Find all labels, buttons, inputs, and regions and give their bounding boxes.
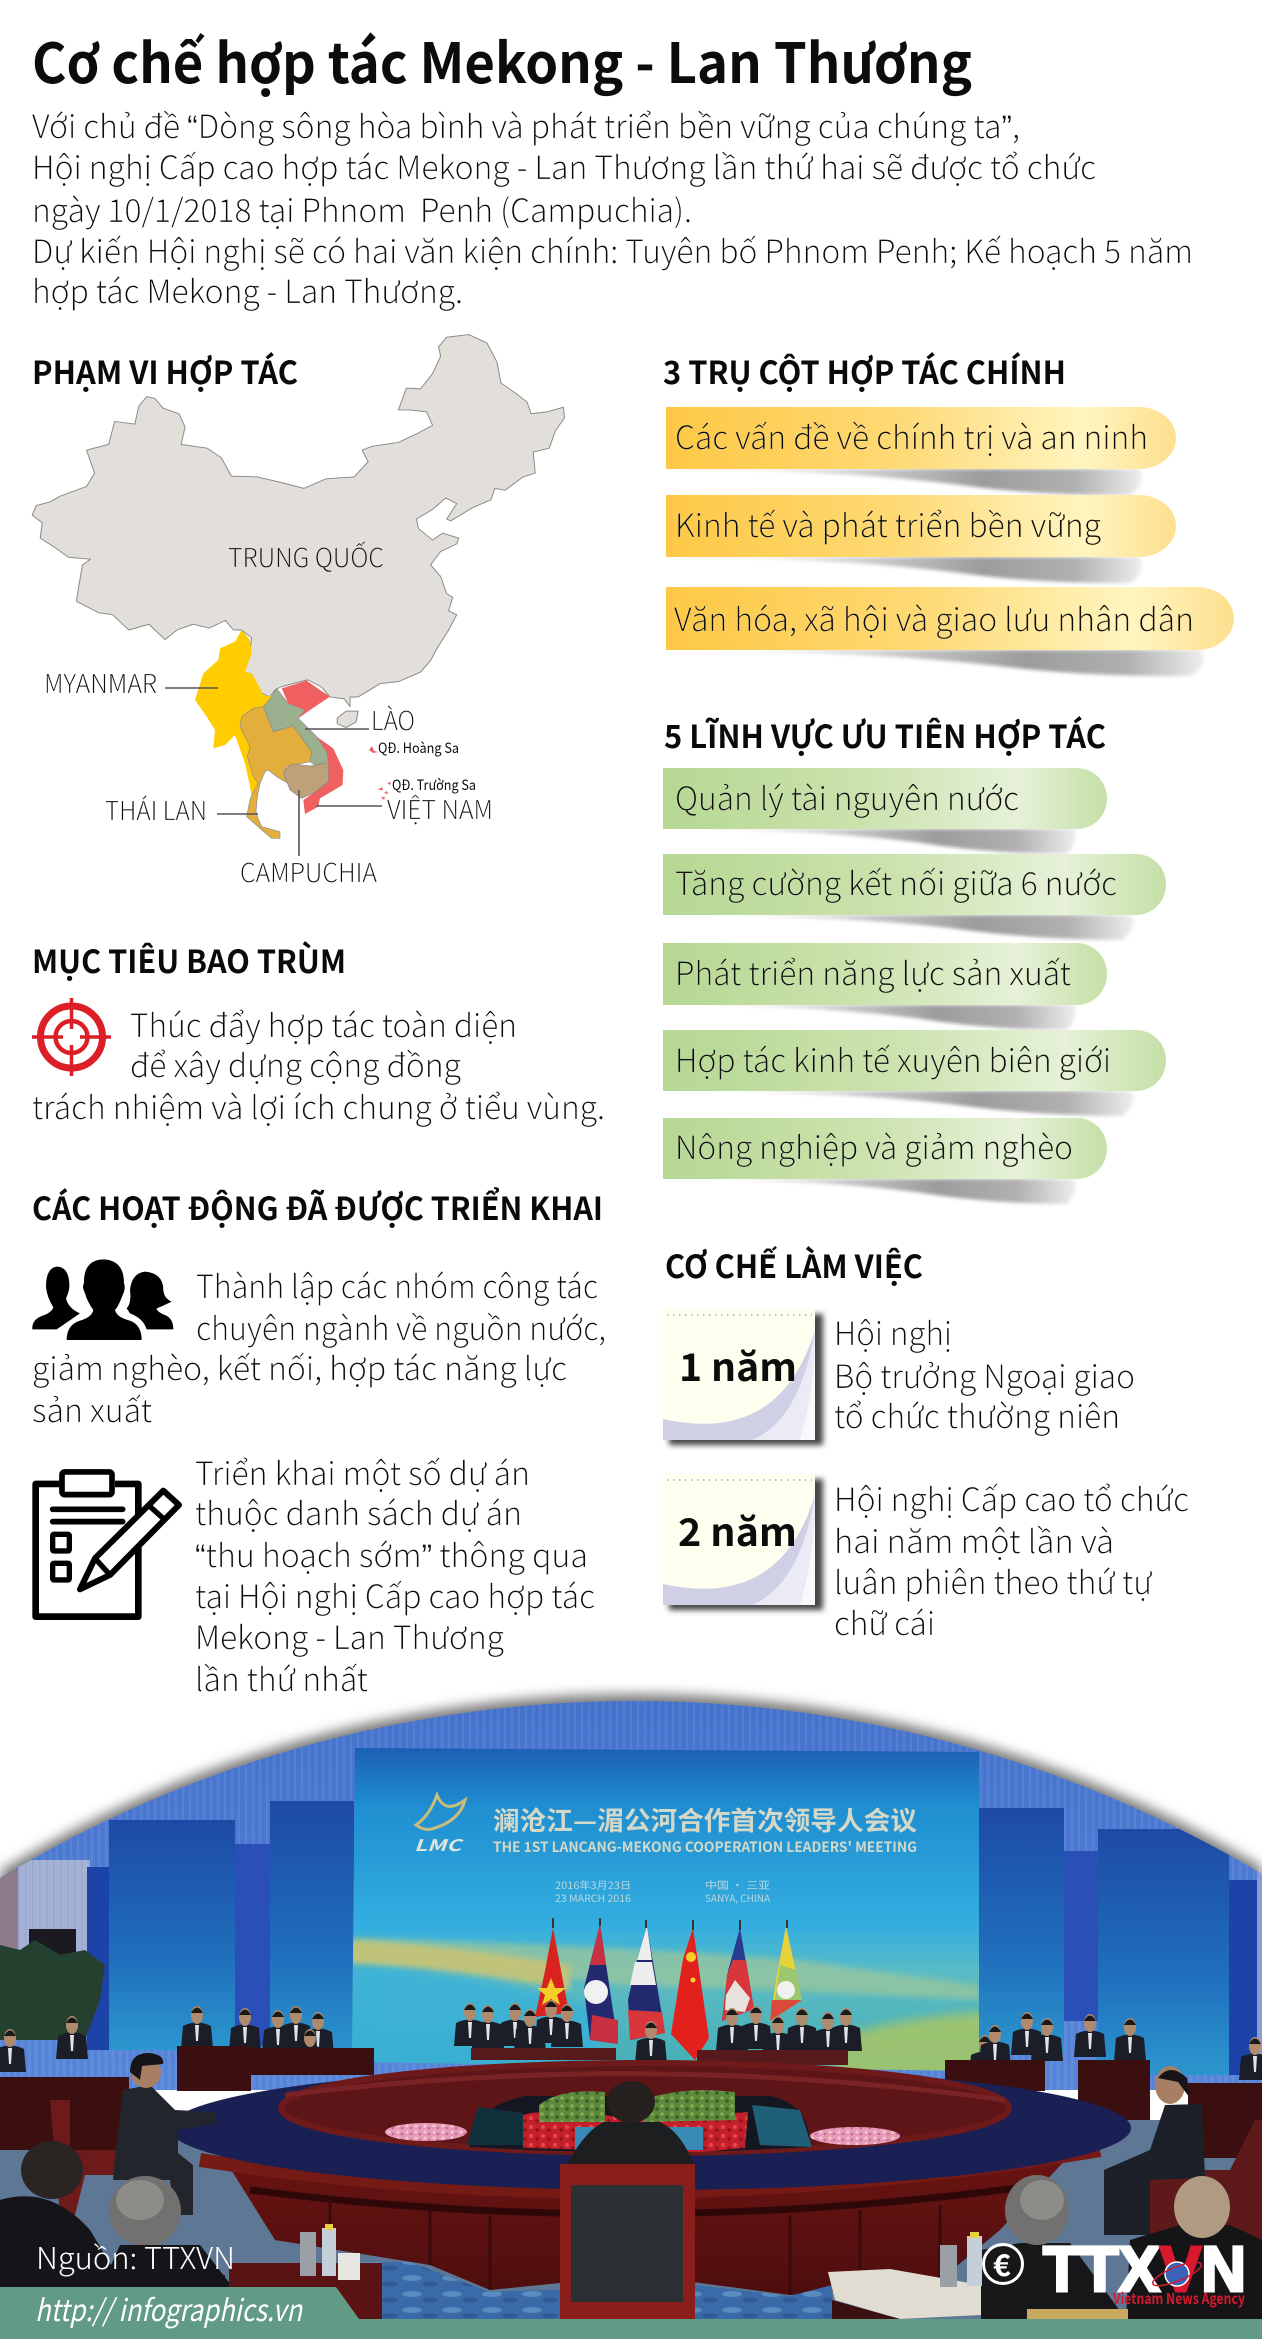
activity text 1 xyxy=(32,1262,606,1432)
flowers and monitors xyxy=(385,2090,900,2152)
url: http:// infographics.vn xyxy=(35,2286,303,2330)
LMC logo: LMC xyxy=(414,1832,465,1856)
pillar 3 xyxy=(666,587,1234,676)
mechanism text 1 xyxy=(834,1309,1135,1438)
priority 4 xyxy=(663,1030,1166,1116)
screen dates: 中国 · 三亚 xyxy=(705,1877,770,1892)
map label: Laos: LÀO xyxy=(371,701,415,738)
intro text block: hợp tác Mekong - Lan Thương. xyxy=(32,267,463,313)
foreground right delegates and papers xyxy=(828,2175,1262,2319)
main screen xyxy=(345,1748,990,2080)
Spratly islands: QĐ. Trường Sa xyxy=(392,775,476,795)
wordmark: TTXVN xyxy=(1043,2233,1246,2305)
goal text: trách nhiệm và lợi ích chung ở tiểu vùng. xyxy=(32,1083,605,1129)
source: Nguồn: TTXVN xyxy=(36,2234,235,2278)
panel: overarching goal xyxy=(32,937,605,1129)
map label: Cambodia: CAMPUCHIA xyxy=(240,853,378,890)
footer bar xyxy=(0,2319,1262,2339)
photo dome shadow xyxy=(0,1694,1262,1913)
activity text 1: chuyên ngành về nguồn nước, xyxy=(196,1304,606,1350)
intro text block: ngày 10/1/2018 tại Phnom Penh (Campuchia). xyxy=(32,186,692,232)
round table xyxy=(169,2063,1131,2295)
activity text 1: sản xuất xyxy=(32,1386,152,1432)
carpet xyxy=(362,2262,832,2319)
heading: goal: MỤC TIÊU BAO TRÙM xyxy=(32,937,346,983)
heading: activities: CÁC HOẠT ĐỘNG ĐÃ ĐƯỢC TRIỂN KHAI xyxy=(32,1184,603,1230)
six flags xyxy=(535,1918,802,2060)
goal text xyxy=(32,1001,605,1129)
mechanism text 1: Bộ trưởng Ngoại giao xyxy=(834,1352,1135,1398)
calendar: 2 years xyxy=(663,1474,823,1610)
Spratly islands xyxy=(378,775,476,800)
calendar: 1 year: 1 năm xyxy=(679,1337,797,1392)
activity text 1: Thành lập các nhóm công tác xyxy=(196,1262,598,1308)
screen dates: SANYA, CHINA xyxy=(705,1890,771,1905)
pillar 1 xyxy=(666,407,1176,495)
copyright mark: € xyxy=(993,2241,1011,2285)
map of China and Mekong countries xyxy=(32,335,565,838)
activity text 2: lần thứ nhất xyxy=(195,1655,368,1701)
footer tab xyxy=(0,2287,359,2339)
mechanism text 2: Hội nghị Cấp cao tổ chức xyxy=(834,1475,1189,1521)
foreground left delegates xyxy=(0,2141,235,2290)
heading: mechanism: CƠ CHẾ LÀM VIỆC xyxy=(665,1242,923,1288)
priority 5: Nông nghiệp và giảm nghèo xyxy=(675,1123,1073,1169)
priority 3: Phát triển năng lực sản xuất xyxy=(675,949,1071,995)
intro text block: Hội nghị Cấp cao hợp tác Mekong - Lan Thương lần thứ hai sẽ được tổ chức xyxy=(32,143,1096,189)
leader lines xyxy=(165,688,382,856)
mechanism text 2 xyxy=(834,1475,1189,1645)
panel: meeting photo xyxy=(0,1690,1262,2319)
screen title in English: THE 1ST LANCANG-MEKONG COOPERATION LEADERS' MEETING xyxy=(493,1837,917,1857)
map label: Vietnam: VIỆT NAM xyxy=(387,790,493,827)
activity text 2: Triển khai một số dự án xyxy=(195,1449,530,1495)
activity text 2 xyxy=(195,1449,595,1701)
copyright mark xyxy=(984,2241,1022,2285)
icon: clipboard and pen xyxy=(36,1472,179,1617)
seated delegate right xyxy=(1104,2066,1262,2250)
calendar: 1 year xyxy=(663,1309,823,1445)
priority 1: Quản lý tài nguyên nước xyxy=(675,774,1019,820)
calendar: 2 years: 2 năm xyxy=(678,1502,797,1557)
priority 2 xyxy=(663,854,1166,940)
mechanism text 2: hai năm một lần và xyxy=(834,1517,1114,1563)
intro text block: Với chủ đề “Dòng sông hòa bình và phát triển bền vững của chúng ta”, xyxy=(32,102,1020,148)
mechanism text 2: chữ cái xyxy=(834,1599,935,1645)
panel: three pillars xyxy=(663,348,1234,676)
panel: five priorities xyxy=(663,712,1166,1204)
central chair and delegate xyxy=(560,2081,695,2319)
stage backdrop xyxy=(0,1690,1262,2090)
pillar 3: Văn hóa, xã hội và giao lưu nhân dân xyxy=(674,595,1194,641)
pillar 2 xyxy=(666,495,1176,583)
icon: people xyxy=(32,1259,173,1340)
delegates rows xyxy=(0,2000,1262,2080)
intro text block xyxy=(32,102,1193,313)
activity text 2: thuộc danh sách dự án xyxy=(195,1489,522,1535)
priority 5 xyxy=(663,1118,1107,1204)
LMC logo xyxy=(414,1795,465,1856)
activity text 2: Mekong - Lan Thương xyxy=(195,1613,504,1659)
goal text: để xây dựng cộng đồng xyxy=(130,1041,461,1087)
mechanism text 1: Hội nghị xyxy=(834,1309,952,1355)
screen dates: 2016年3月23日 xyxy=(555,1877,631,1892)
floor xyxy=(0,2120,1262,2319)
heading: scope: PHẠM VI HỢP TÁC xyxy=(32,348,298,394)
globe xyxy=(1150,2258,1204,2290)
logo TTXVN xyxy=(984,2233,1246,2309)
heading: pillars: 3 TRỤ CỘT HỢP TÁC CHÍNH xyxy=(663,348,1066,394)
mechanism text 1: tổ chức thường niên xyxy=(834,1392,1120,1438)
icon: target xyxy=(32,998,111,1076)
heading: priorities: 5 LĨNH VỰC ƯU TIÊN HỢP TÁC xyxy=(664,712,1106,758)
panel: working mechanism xyxy=(663,1242,1189,1645)
screen title in Chinese: 澜沧江—湄公河合作首次领导人会议 xyxy=(493,1801,917,1838)
intro text block: Dự kiến Hội nghị sẽ có hai văn kiện chính: Tuyên bố Phnom Penh; Kế hoạch 5 năm xyxy=(32,227,1193,273)
map label: China: TRUNG QUỐC xyxy=(228,538,384,575)
mechanism text 2: luân phiên theo thứ tự xyxy=(834,1558,1152,1604)
Paracel islands: QĐ. Hoàng Sa xyxy=(378,738,459,758)
priority 4: Hợp tác kinh tế xuyên biên giới xyxy=(675,1036,1111,1082)
panel: scope map xyxy=(32,335,565,890)
map label: Myanmar: MYANMAR xyxy=(44,664,157,701)
title: Cơ chế hợp tác Mekong - Lan Thương xyxy=(32,19,972,99)
screen dates xyxy=(555,1880,770,1904)
screen dates: 23 MARCH 2016 xyxy=(555,1890,631,1905)
priority 1 xyxy=(663,768,1107,854)
pillar 2: Kinh tế và phát triển bền vững xyxy=(675,501,1101,547)
goal text: Thúc đẩy hợp tác toàn diện xyxy=(130,1001,517,1047)
map label: Thailand: THÁI LAN xyxy=(105,791,207,828)
foreground table and bottles left xyxy=(229,2224,382,2319)
priority 3 xyxy=(663,943,1107,1030)
pillar 1: Các vấn đề về chính trị và an ninh xyxy=(675,413,1148,459)
delegate tables xyxy=(0,2046,1262,2158)
panel: activities xyxy=(32,1184,606,1701)
activity text 2: tại Hội nghị Cấp cao hợp tác xyxy=(195,1572,595,1618)
priority 2: Tăng cường kết nối giữa 6 nước xyxy=(675,859,1117,905)
activity text 1: giảm nghèo, kết nối, hợp tác năng lực xyxy=(32,1344,567,1390)
seated delegate left xyxy=(50,2053,217,2215)
activity text 2: “thu hoạch sớm” thông qua xyxy=(195,1531,588,1577)
